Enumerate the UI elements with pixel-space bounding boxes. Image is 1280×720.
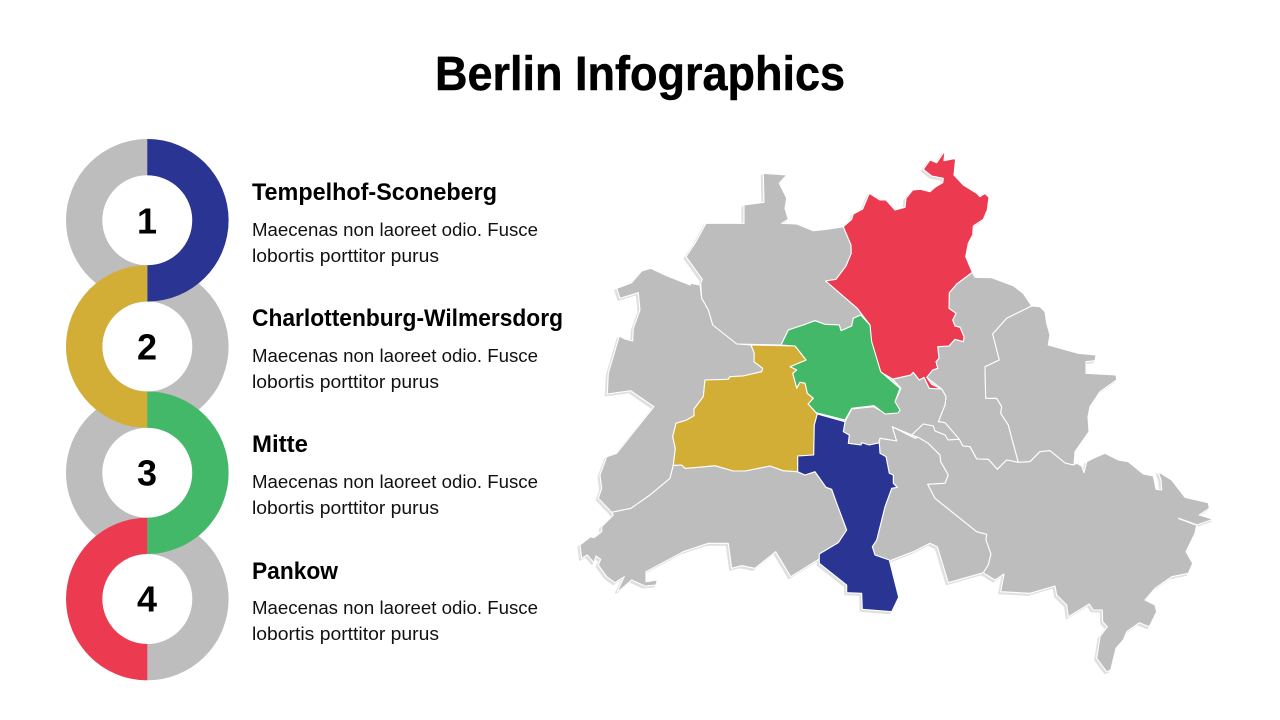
text block 4: Pankow [252,558,338,585]
text block 1 [252,179,538,266]
text block 3: Mitte [252,431,308,458]
ring 2 yellow half [66,265,147,428]
map of Berlin districts [580,151,1213,672]
district: Charlottenburg-Wilmersdorf (yellow) [673,345,817,472]
district: Lichtenberg [927,272,1032,469]
number 3: 3 [137,452,157,494]
district: Tempelhof-Schoeneberg (blue) [798,414,899,612]
district: Reinickendorf [686,173,862,345]
number 2: 2 [137,326,157,368]
district: Spandau [598,268,763,512]
title: Berlin Infographics [435,48,845,101]
text block 2: lobortis porttitor purus [252,372,439,392]
text block 4: Maecenas non laoreet odio. Fusce [252,598,538,618]
text block 3: Maecenas non laoreet odio. Fusce [252,472,538,492]
text block 3 [252,431,538,518]
number 1: 1 [137,200,157,242]
ring 1 blue half [147,139,229,302]
text block 1: lobortis porttitor purus [252,246,439,266]
district: Steglitz-Zehlendorf [580,465,847,591]
text block 2 [252,305,563,392]
district: Friedrichshain-Kreuzberg [843,372,959,445]
district: Treptow-Koepenick [912,424,1213,672]
text block 3: lobortis porttitor purus [252,498,439,518]
district: Marzahn-Hellersdorf [985,306,1117,465]
text block 2: Maecenas non laoreet odio. Fusce [252,346,538,366]
river line [1178,518,1197,525]
text block 2: Charlottenburg-Wilmersdorg [252,305,563,332]
text block 1: Tempelhof-Sconeberg [252,179,497,206]
ring 3 green half [147,391,229,554]
text block 4: lobortis porttitor purus [252,624,439,644]
district: Neukoelln [872,427,991,583]
text block 4 [252,558,538,644]
ring 4 red half [66,518,147,680]
district: Pankow (red) [826,151,989,389]
district: Mitte (green) [781,315,900,420]
number 4: 4 [137,578,157,620]
text block 1: Maecenas non laoreet odio. Fusce [252,220,538,240]
chain of numbered rings [66,139,229,680]
